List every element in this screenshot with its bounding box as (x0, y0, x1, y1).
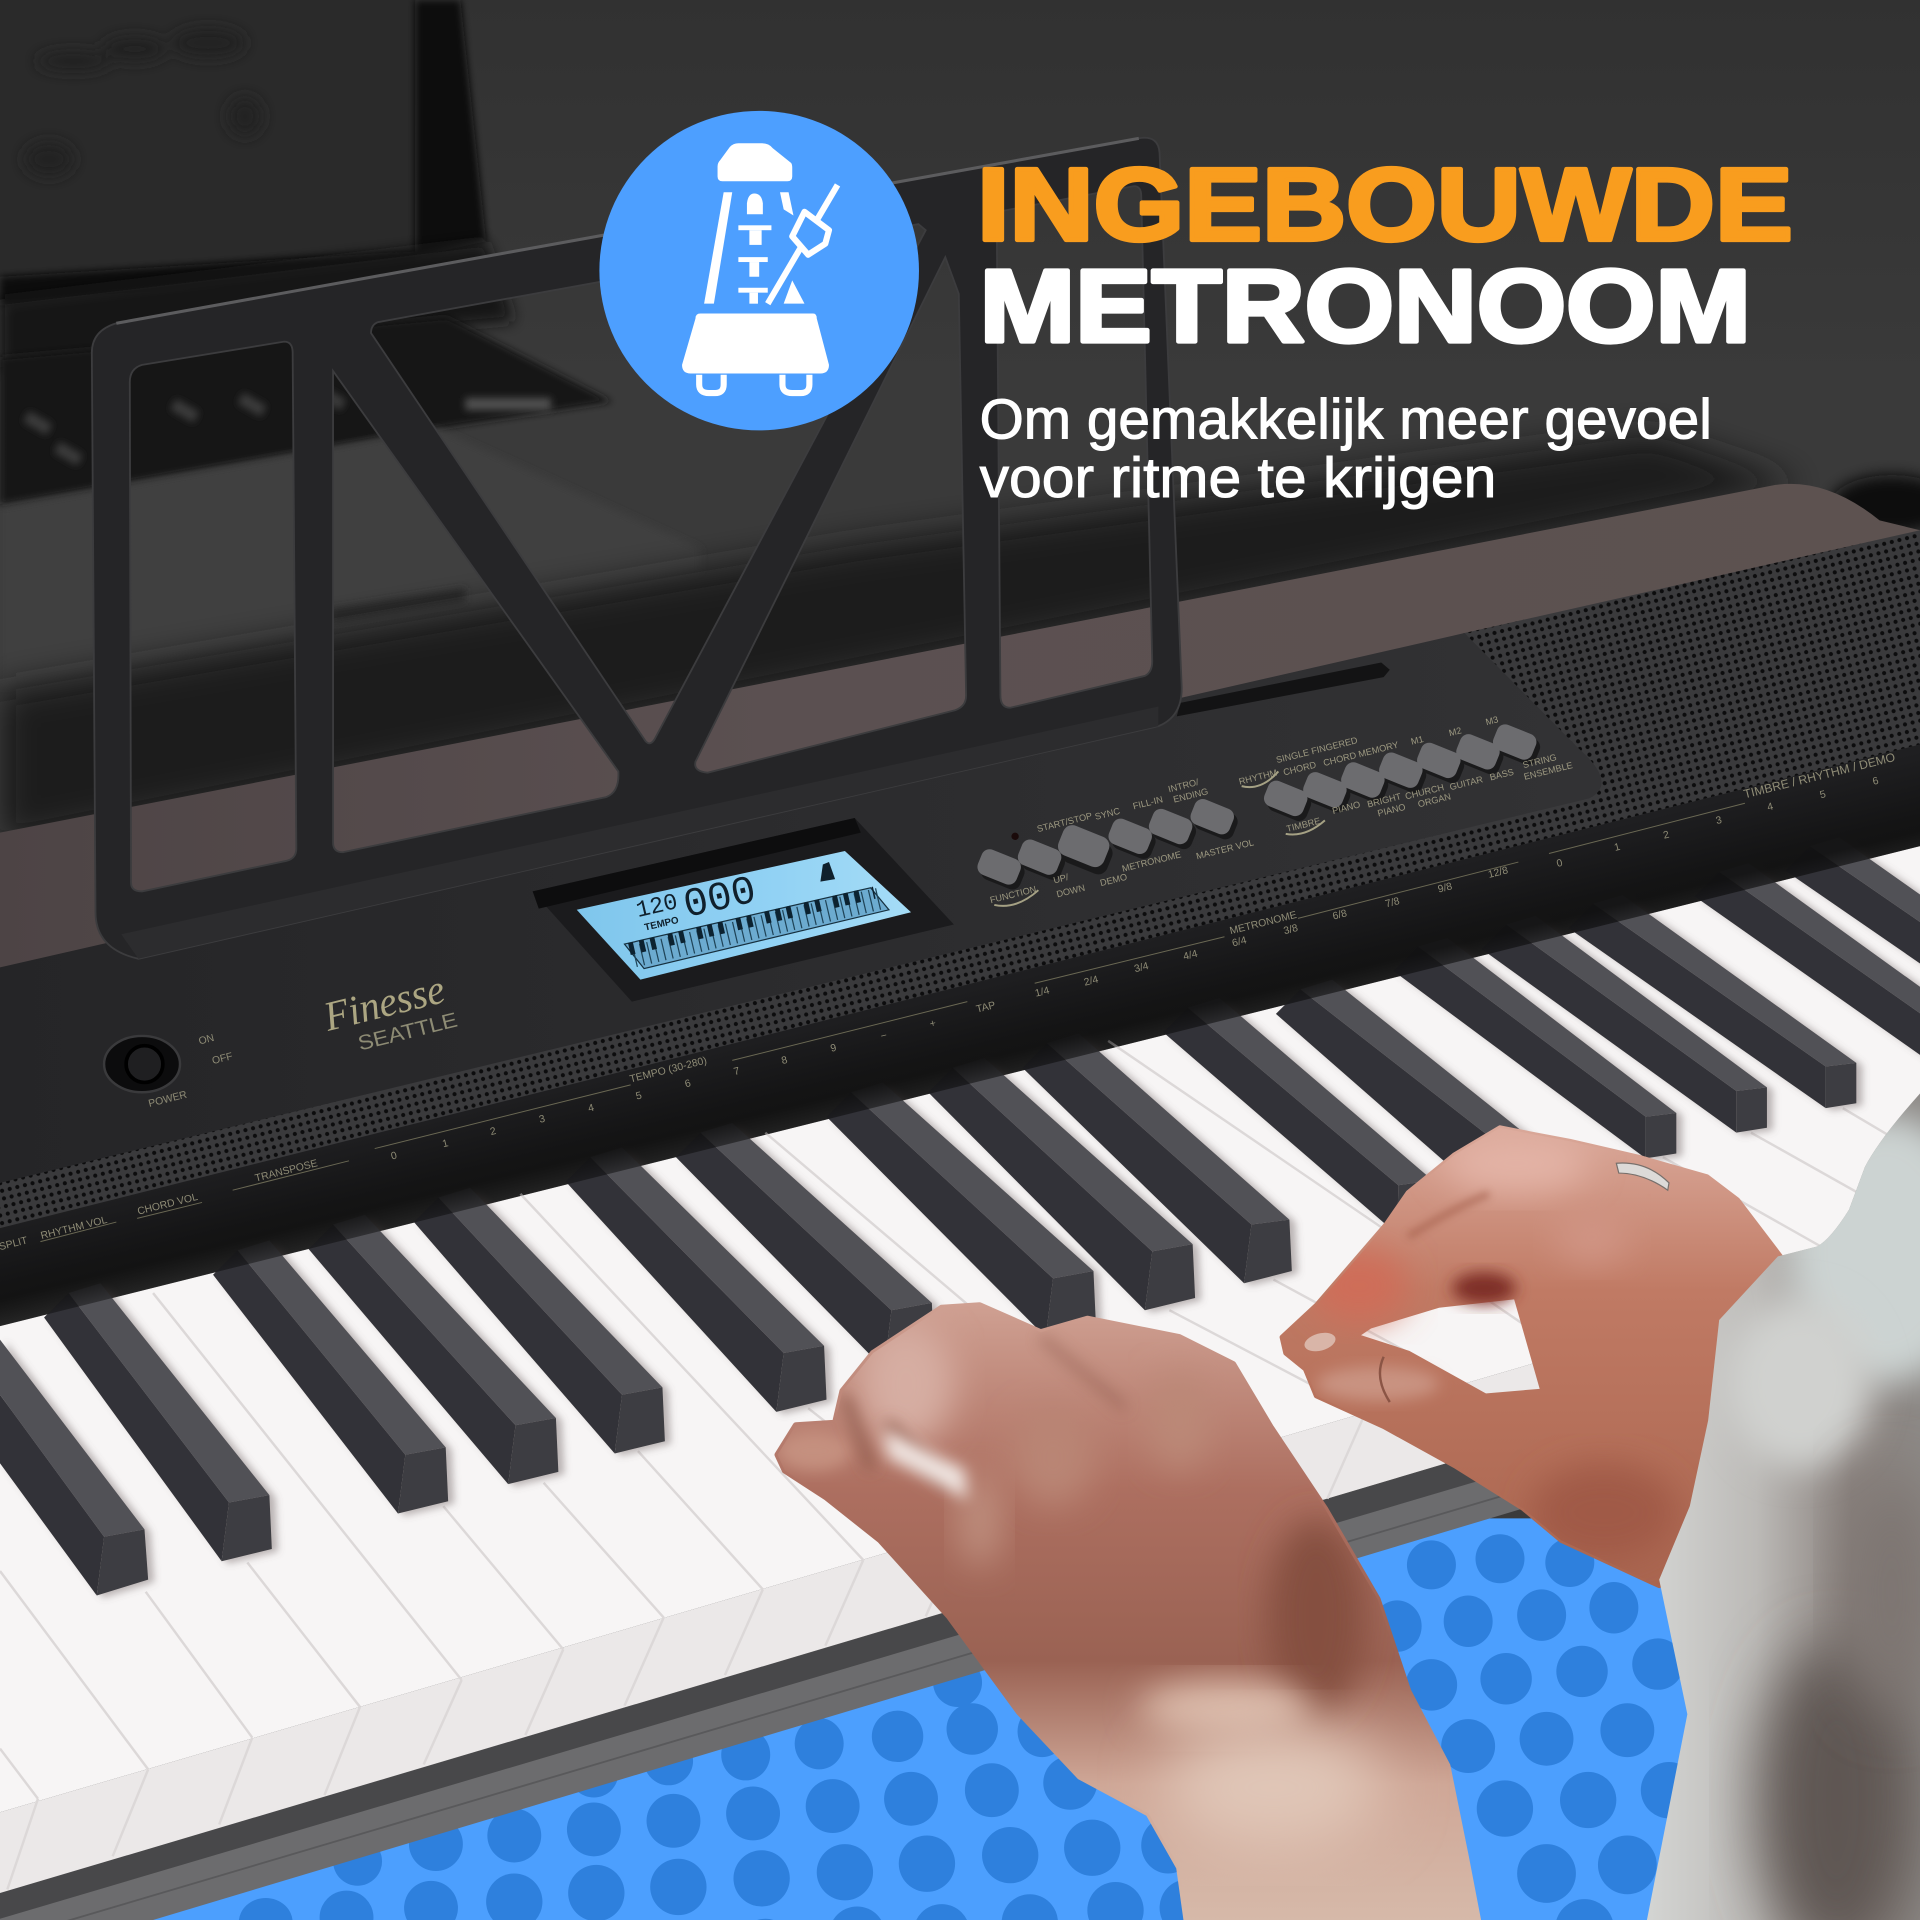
front panel labels: 2 (489, 1126, 498, 1138)
panel button labels: ORGAN (1417, 791, 1452, 809)
panel button labels: DEMO (1099, 872, 1128, 888)
left hand (778, 1305, 1478, 1920)
front panel labels: TRANSPOSE (254, 1158, 319, 1185)
power knob: POWER (147, 1090, 189, 1110)
panel button labels (989, 714, 1574, 906)
blue dotted mat (122, 1518, 1714, 1920)
front panel labels: 7 (733, 1066, 741, 1078)
LCD metronome symbol (820, 862, 835, 882)
panel button labels: UP/ (1052, 872, 1070, 885)
front panel labels: 9 (829, 1043, 838, 1055)
LCD piano keyboard graphic (624, 888, 889, 969)
front panel labels: 4/4 (1182, 949, 1199, 963)
title (977, 147, 1793, 364)
panel button labels: MASTER VOL (1195, 837, 1255, 861)
subtitle: voor ritme te krijgen (980, 446, 1496, 509)
panel button labels: M2 (1448, 725, 1463, 738)
front panel labels: RHYTHM VOL (40, 1215, 109, 1242)
power knob (104, 1033, 234, 1110)
front panel labels: CHORD VOL (136, 1192, 199, 1218)
subtitle (980, 387, 1712, 509)
front panel labels: 5 (635, 1090, 643, 1103)
front panel labels: 3/8 (1283, 923, 1299, 937)
front panel labels: TAP (975, 1000, 997, 1016)
front panel labels: 2/4 (1083, 974, 1100, 989)
panel button labels: CHORD (1282, 760, 1318, 777)
keyboard control panel surface (0, 633, 1602, 1183)
Finesse logo: Finesse (319, 966, 449, 1041)
power knob: OFF (211, 1051, 234, 1067)
panel button labels: M3 (1485, 714, 1499, 727)
front label panel (0, 744, 1920, 1326)
front panel labels: 3/4 (1133, 961, 1150, 975)
panel button labels: M1 (1410, 734, 1425, 747)
panel button labels: CHURCH (1404, 782, 1445, 801)
front panel labels: 2 (1662, 830, 1671, 842)
button group accents (994, 771, 1325, 906)
panel button labels: DOWN (1055, 883, 1086, 899)
brown rear strip of the keyboard (0, 484, 1920, 980)
panel button labels: FILL-IN (1132, 794, 1164, 811)
panel button labels: BASS (1489, 767, 1515, 782)
panel buttons (975, 722, 1543, 892)
music stand (92, 138, 1182, 959)
music stand top highlight (116, 138, 1139, 323)
front panel labels: 12/8 (1487, 865, 1510, 881)
panel button labels: START/STOP (1036, 811, 1093, 834)
LCD tempo readout: 120 (634, 889, 680, 924)
power knob: ON (198, 1033, 215, 1047)
front panel labels: 1 (441, 1138, 450, 1150)
front panel labels (0, 750, 1897, 1253)
grey front rail of the keyboard (0, 1420, 1592, 1920)
panel button labels: PIANO (1331, 799, 1361, 816)
panel button labels: TIMBRE (1285, 816, 1321, 834)
front panel labels: 0 (390, 1150, 398, 1163)
icon: metronome (682, 143, 838, 393)
panel button labels: SYNC (1094, 806, 1121, 822)
front panel labels: 6/8 (1332, 908, 1348, 923)
front panel labels: METRONOME (1229, 910, 1298, 937)
front panel labels: 5 (1819, 789, 1827, 801)
panel button labels: METRONOME (1121, 849, 1182, 874)
front panel labels: 8 (781, 1055, 789, 1067)
front panel labels: 9/8 (1437, 881, 1454, 896)
panel button labels: BRIGHT (1366, 791, 1403, 809)
panel button labels: SINGLE FINGERED (1275, 735, 1359, 765)
front panel labels: 4 (587, 1103, 596, 1115)
title line: white: METRONOOM (980, 249, 1751, 364)
speaker grille (0, 530, 1920, 1228)
front panel labels: 0 (1556, 858, 1564, 870)
front panel labels: 1 (1613, 842, 1622, 854)
stand slot (1177, 662, 1390, 716)
front panel labels: 6 (684, 1078, 692, 1090)
panel button labels: FUNCTION (989, 884, 1037, 905)
panel button labels: ENDING (1172, 786, 1209, 805)
black keys (0, 838, 1920, 1596)
player's sleeve (1647, 1093, 1920, 1920)
model name: SEATTLE (356, 1009, 460, 1055)
music stand tray (121, 707, 1158, 959)
metronome badge (599, 111, 919, 430)
LCD display (533, 818, 954, 1002)
subtitle: Om gemakkelijk meer gevoel (980, 387, 1712, 450)
panel button labels: CHORD MEMORY (1322, 740, 1400, 768)
title line: orange: INGEBOUWDE (977, 147, 1793, 262)
front panel labels: − (880, 1030, 888, 1043)
panel button labels: INTRO/ (1167, 777, 1200, 794)
front panel labels: TEMPO (30-280) (629, 1056, 708, 1085)
front panel labels: 4 (1766, 801, 1775, 814)
front panel labels: 3 (1715, 815, 1723, 827)
panel button labels: STRING (1522, 752, 1558, 770)
LCD beat counter: 000 (680, 869, 761, 930)
front panel labels: 3 (538, 1114, 547, 1126)
panel button labels: GUITAR (1449, 774, 1484, 792)
front panel labels: 6 (1872, 776, 1880, 788)
white keys (0, 846, 1920, 1893)
front panel labels: 7/8 (1384, 896, 1401, 910)
panel button labels: ENSEMBLE (1523, 760, 1574, 782)
front panel labels: 6/4 (1231, 935, 1248, 949)
front panel labels: + (929, 1018, 937, 1030)
panel button labels: RHYTHM (1238, 767, 1278, 787)
panel button labels: PIANO (1376, 802, 1407, 818)
LCD tempo label: TEMPO (644, 915, 680, 934)
front panel labels: 1/4 (1034, 985, 1051, 1000)
right hand (1282, 1128, 1780, 1586)
label guide lines (40, 803, 1745, 1242)
front panel labels: TIMBRE / RHYTHM / DEMO (1742, 750, 1897, 801)
wedding ring (1616, 1163, 1669, 1190)
